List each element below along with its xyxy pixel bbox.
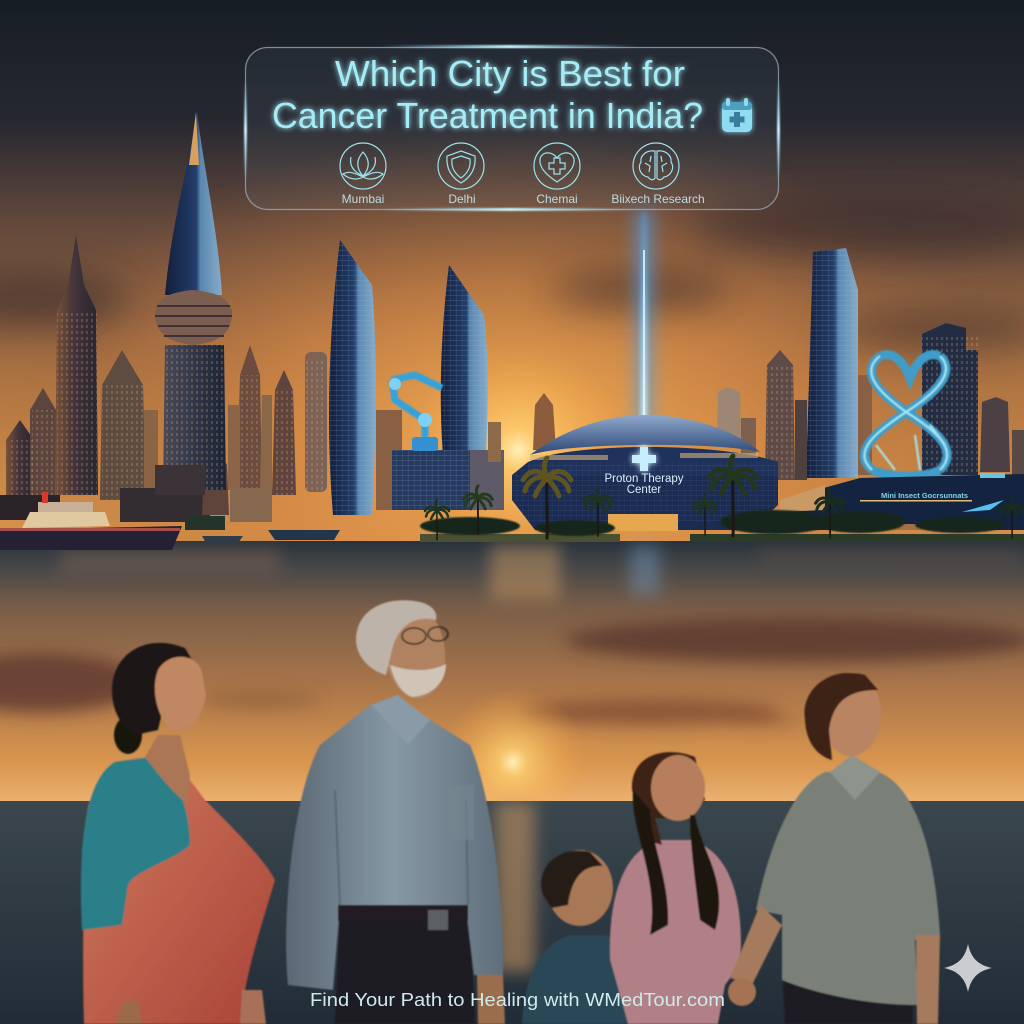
left skyline xyxy=(0,235,402,522)
title text xyxy=(272,53,703,136)
sun glow on skyline xyxy=(408,340,628,560)
icon labels: Biixech Research xyxy=(611,192,705,206)
icon: sparkle xyxy=(944,944,992,992)
sun reflection xyxy=(495,802,535,972)
icon: shield xyxy=(438,143,484,189)
icon: brain xyxy=(633,143,679,189)
shoreline trees xyxy=(185,456,1024,542)
person: boy xyxy=(522,850,640,1024)
icon: heart with cross xyxy=(534,143,580,189)
title text: Cancer Treatment in India? xyxy=(272,95,703,136)
lower sky clouds xyxy=(0,618,1024,725)
warm horizon glow xyxy=(0,0,1024,545)
building sign: Center xyxy=(627,484,661,496)
person: girl xyxy=(610,752,741,1024)
icon labels: Chemai xyxy=(536,192,578,206)
icon: medical calendar xyxy=(722,98,752,132)
DNA helix sculpture xyxy=(864,355,947,476)
setting sun xyxy=(438,687,588,837)
title text: Which City is Best for xyxy=(335,53,685,94)
footer tagline: Find Your Path to Healing with WMedTour.com xyxy=(310,990,725,1010)
robot arm building xyxy=(389,375,556,510)
main spire tower xyxy=(155,112,232,495)
background sky xyxy=(0,0,1024,545)
person: woman on the right xyxy=(728,672,940,1024)
icon: lotus xyxy=(340,143,386,189)
person: older man xyxy=(286,600,505,1024)
sky clouds xyxy=(0,193,1024,348)
title panel xyxy=(244,45,780,211)
cruise ship xyxy=(0,492,340,550)
water xyxy=(0,541,1024,803)
glass twin towers xyxy=(329,240,488,515)
icon: medical cross xyxy=(632,447,656,471)
proton beam xyxy=(634,210,654,445)
building sign: Proton Therapy xyxy=(604,473,684,485)
water reflections xyxy=(60,545,1020,600)
icon labels xyxy=(342,192,705,206)
sea xyxy=(0,801,1024,1024)
icon labels: Delhi xyxy=(448,192,476,206)
low blue building: Mini Insect Gocrsunnats xyxy=(881,491,968,500)
low blue building xyxy=(780,473,1024,534)
proton therapy dome xyxy=(512,415,778,531)
person: woman in sari xyxy=(81,643,275,1024)
right skyline xyxy=(717,248,1024,480)
icon labels: Mumbai xyxy=(342,192,384,206)
